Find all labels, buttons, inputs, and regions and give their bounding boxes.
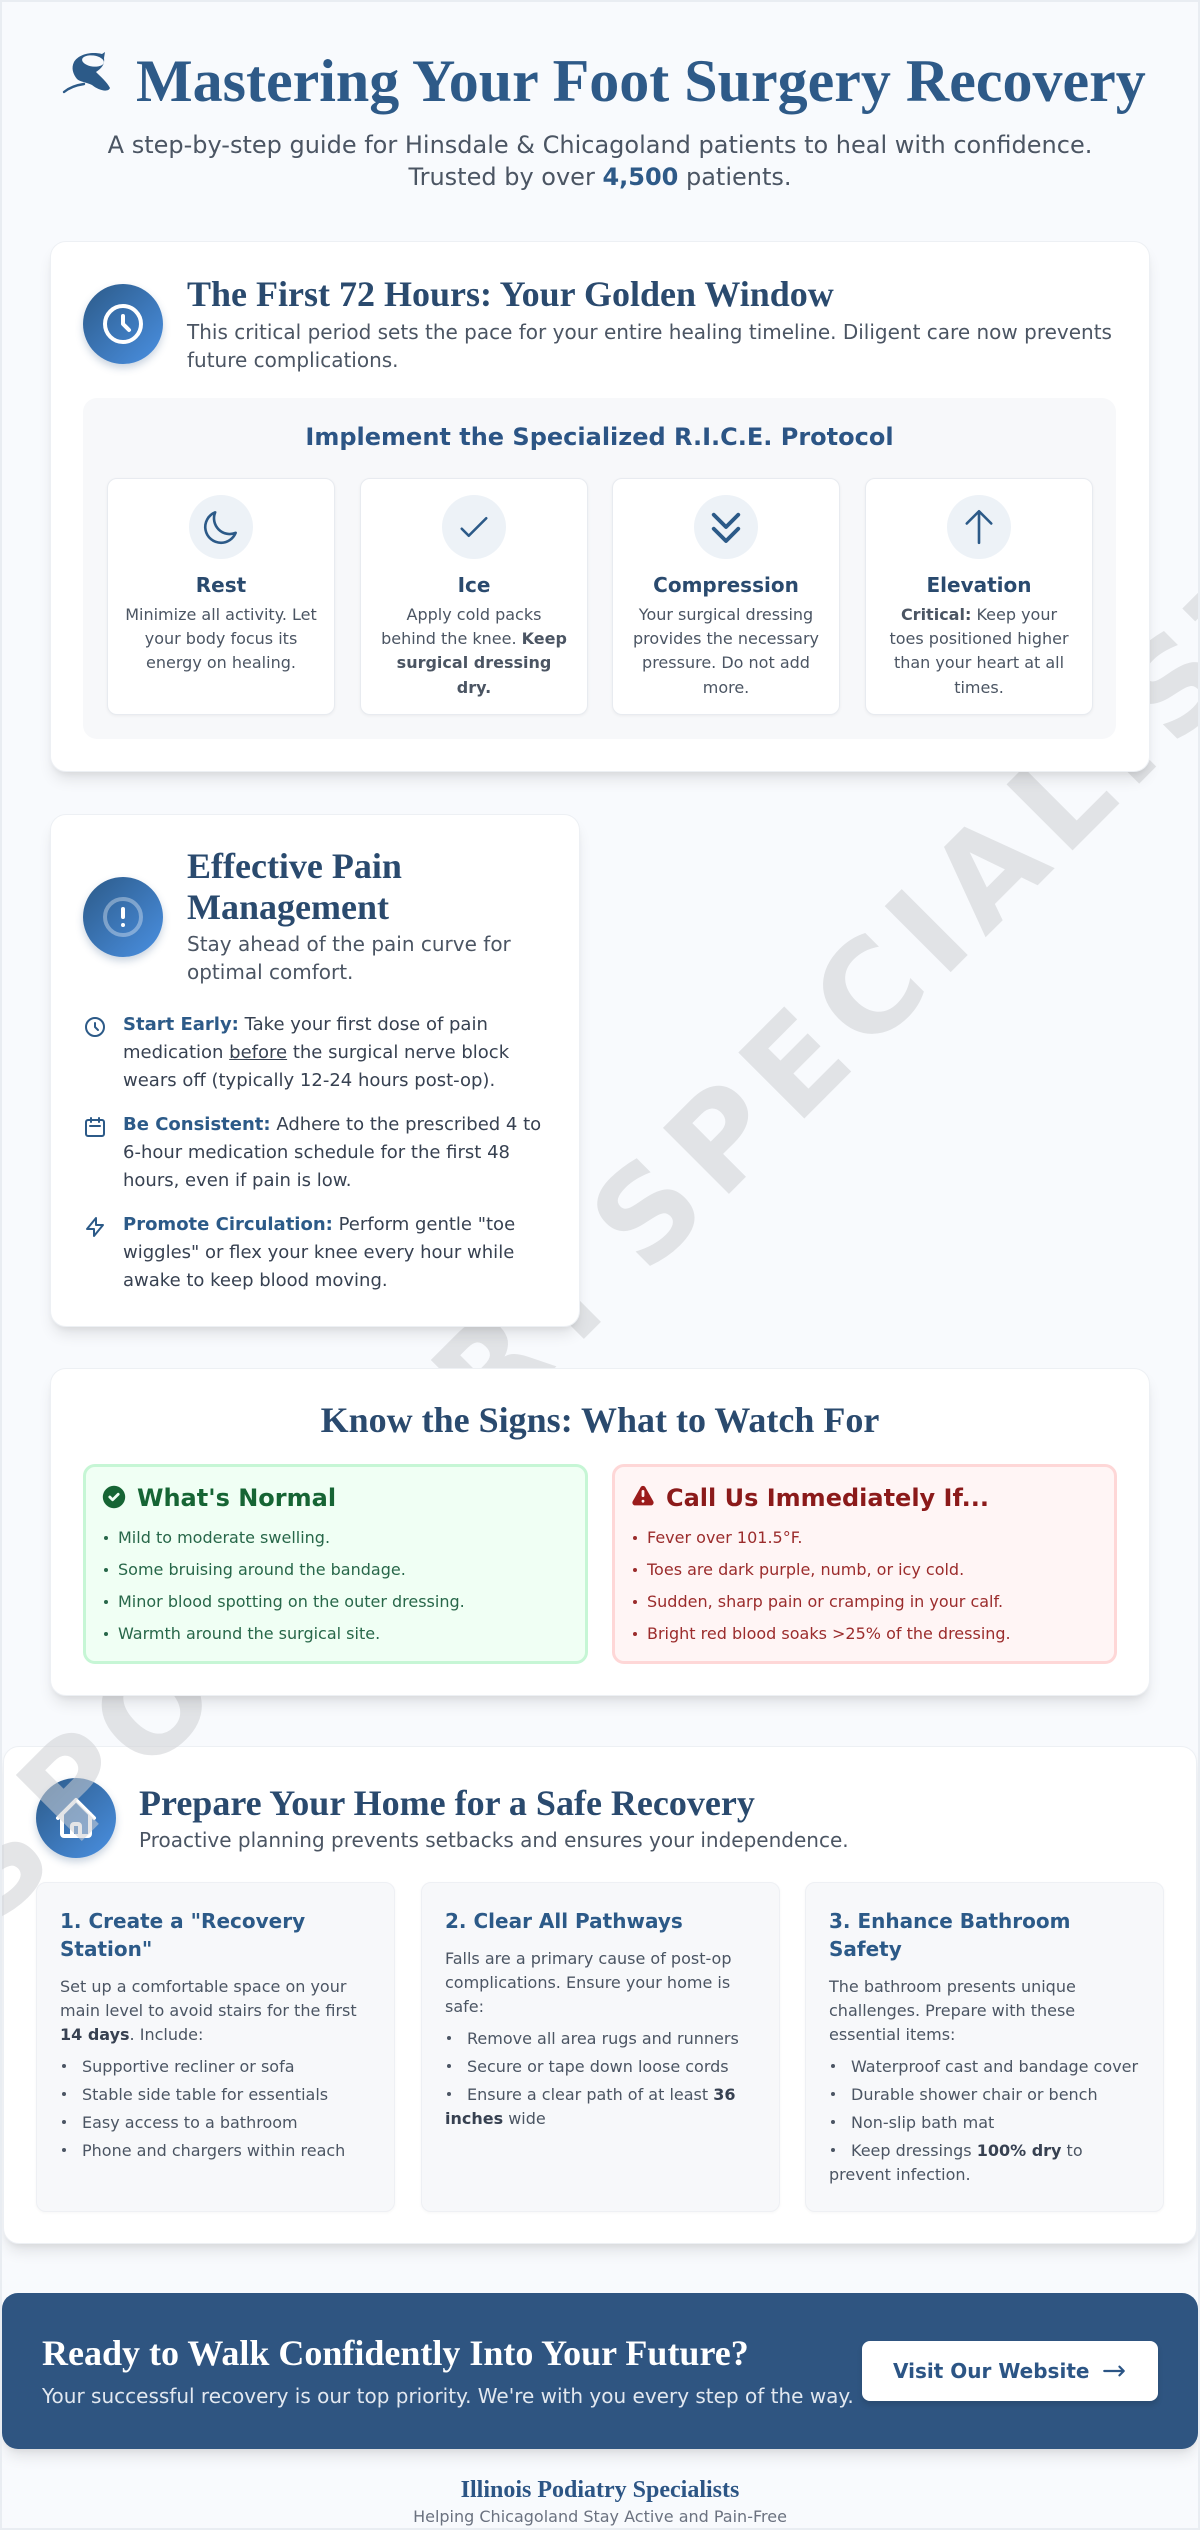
card: clear pathways: Secure or tape down loose cords bbox=[467, 2057, 729, 2076]
card: recovery station: Easy access to a bathroom bbox=[82, 2113, 298, 2132]
subtitle: A step-by-step guide for Hinsdale & Chicagoland patients to heal with confidence. bbox=[108, 131, 1092, 159]
box: normal: Mild to moderate swelling. bbox=[118, 1528, 330, 1547]
panel: pain management bbox=[50, 814, 580, 1327]
title: Mastering Your Foot Surgery Recovery bbox=[136, 48, 1146, 114]
box: normal: Minor blood spotting on the outer dressing. bbox=[118, 1592, 465, 1611]
icon: check badge bbox=[102, 1486, 126, 1508]
footer name: Illinois Podiatry Specialists bbox=[461, 2477, 739, 2503]
heading: know the signs: Know the Signs: What to Watch For bbox=[321, 1400, 879, 1440]
heading: cta: Ready to Walk Confidently Into Your Future? bbox=[42, 2333, 749, 2373]
card: recovery station: Stable side table for essentials bbox=[82, 2085, 328, 2104]
item: start early: Start Early: Take your first dose of pain medication before the surgical nerve block wears off (typically 12-24 hours post-op). bbox=[123, 1014, 509, 1091]
icon: clock bbox=[83, 284, 163, 364]
card: bathroom safety: Waterproof cast and bandage cover bbox=[851, 2057, 1138, 2076]
icon: foot logo bbox=[62, 52, 110, 94]
box: normal: What's Normal bbox=[137, 1484, 336, 1512]
icon: alert bbox=[83, 877, 163, 957]
card: ice bbox=[360, 478, 588, 715]
card: clear pathways: 2. Clear All Pathways bbox=[445, 1909, 683, 1933]
icon: arrow up bbox=[947, 495, 1011, 559]
button: visit website bbox=[862, 2341, 1158, 2401]
card: bathroom safety: Non-slip bath mat bbox=[851, 2113, 994, 2132]
box: call us: Fever over 101.5°F. bbox=[647, 1528, 802, 1547]
card: clear pathways: Ensure a clear path of at least 36 inches wide bbox=[445, 2085, 736, 2128]
footer bbox=[413, 2477, 787, 2526]
icon: warning bbox=[632, 1486, 654, 1506]
card: bathroom safety: 3. Enhance Bathroom Safety bbox=[829, 1909, 1070, 1960]
card: compression bbox=[612, 478, 840, 715]
text: pain intro: Stay ahead of the pain curve for optimal comfort. bbox=[187, 932, 511, 984]
card: recovery station: 1. Create a "Recovery Station" bbox=[60, 1909, 305, 1960]
card: rest: Rest bbox=[196, 573, 246, 597]
footer tagline: Helping Chicagoland Stay Active and Pain-Free bbox=[413, 2507, 787, 2526]
icon: arrow right bbox=[1103, 2366, 1125, 2376]
card: bathroom safety: Keep dressings 100% dry to prevent infection. bbox=[829, 2141, 1083, 2184]
card: compression: Your surgical dressing provides the necessary pressure. Do not add more. bbox=[633, 605, 819, 697]
panel: know the signs bbox=[50, 1368, 1150, 1696]
subtitle bbox=[108, 131, 1092, 191]
box: normal: Some bruising around the bandage. bbox=[118, 1560, 406, 1579]
icon: moon bbox=[189, 495, 253, 559]
card: bathroom safety bbox=[805, 1882, 1164, 2212]
heading: prepare your home: Prepare Your Home for a Safe Recovery bbox=[139, 1783, 755, 1823]
card: rest: Minimize all activity. Let your body focus its energy on healing. bbox=[125, 605, 317, 672]
box: normal bbox=[83, 1464, 588, 1664]
card: elevation: Elevation bbox=[926, 573, 1032, 597]
heading: first 72 hours: The First 72 Hours: Your Golden Window bbox=[187, 274, 834, 314]
text: prepare intro: Proactive planning prevents setbacks and ensures your independence. bbox=[139, 1828, 849, 1852]
card: elevation bbox=[865, 478, 1093, 715]
text: first 72 hours intro: This critical period sets the pace for your entire healing timeline. Diligent care now prevents future complications. bbox=[187, 320, 1112, 372]
panel: call to action bbox=[2, 2293, 1198, 2449]
box: call us bbox=[612, 1464, 1117, 1664]
text: cta: Your successful recovery is our top priority. We're with you every step of the way. bbox=[42, 2384, 854, 2408]
card: ice: Ice bbox=[458, 573, 490, 597]
card: clear pathways: Falls are a primary cause of post-op complications. Ensure your home is safe: bbox=[445, 1949, 732, 2016]
card: recovery station: Set up a comfortable space on your main level to avoid stairs for the first 14 days. Include: bbox=[60, 1977, 357, 2044]
header bbox=[62, 48, 1146, 191]
button: visit website: Visit Our Website bbox=[893, 2359, 1089, 2383]
panel: first 72 hours bbox=[50, 241, 1150, 772]
item: promote circulation: Promote Circulation: Perform gentle "toe wiggles" or flex your knee every hour while awake to keep blood moving. bbox=[123, 1214, 515, 1291]
box: call us: Sudden, sharp pain or cramping in your calf. bbox=[647, 1592, 1003, 1611]
item: be consistent: Be Consistent: Adhere to the prescribed 4 to 6-hour medication schedule for the first 48 hours, even if pain is low. bbox=[123, 1114, 541, 1191]
panel: RICE protocol bbox=[83, 398, 1116, 739]
heading: RICE: Implement the Specialized R.I.C.E. Protocol bbox=[305, 423, 894, 451]
card: recovery station bbox=[36, 1882, 395, 2212]
card: ice: Apply cold packs behind the knee. Keep surgical dressing dry. bbox=[381, 605, 567, 697]
heading: pain management bbox=[187, 846, 402, 927]
box: normal: Warmth around the surgical site. bbox=[118, 1624, 380, 1643]
icon: chevrons bbox=[694, 495, 758, 559]
icon: check bbox=[442, 495, 506, 559]
heading: pain management: Effective Pain bbox=[187, 846, 402, 886]
card: bathroom safety: The bathroom presents unique challenges. Prepare with these essential items: bbox=[829, 1977, 1076, 2044]
card: elevation: Critical: Keep your toes positioned higher than your heart at all times. bbox=[889, 605, 1069, 697]
box: call us: Bright red blood soaks >25% of the dressing. bbox=[647, 1624, 1011, 1643]
box: call us: Toes are dark purple, numb, or icy cold. bbox=[647, 1560, 964, 1579]
card: recovery station: Supportive recliner or sofa bbox=[82, 2057, 295, 2076]
card: compression: Compression bbox=[653, 573, 799, 597]
card: clear pathways bbox=[421, 1882, 780, 2212]
card: rest bbox=[107, 478, 335, 715]
panel: home preparation bbox=[3, 1746, 1197, 2244]
subtitle: Trusted by over 4,500 patients. bbox=[408, 163, 792, 191]
heading: pain management: Management bbox=[187, 887, 389, 927]
box: call us: Call Us Immediately If... bbox=[666, 1484, 989, 1512]
card: clear pathways: Remove all area rugs and runners bbox=[467, 2029, 739, 2048]
list: pain tips bbox=[85, 1014, 541, 1291]
icon: house bbox=[36, 1778, 116, 1858]
card: bathroom safety: Durable shower chair or bench bbox=[851, 2085, 1098, 2104]
card: recovery station: Phone and chargers within reach bbox=[82, 2141, 345, 2160]
